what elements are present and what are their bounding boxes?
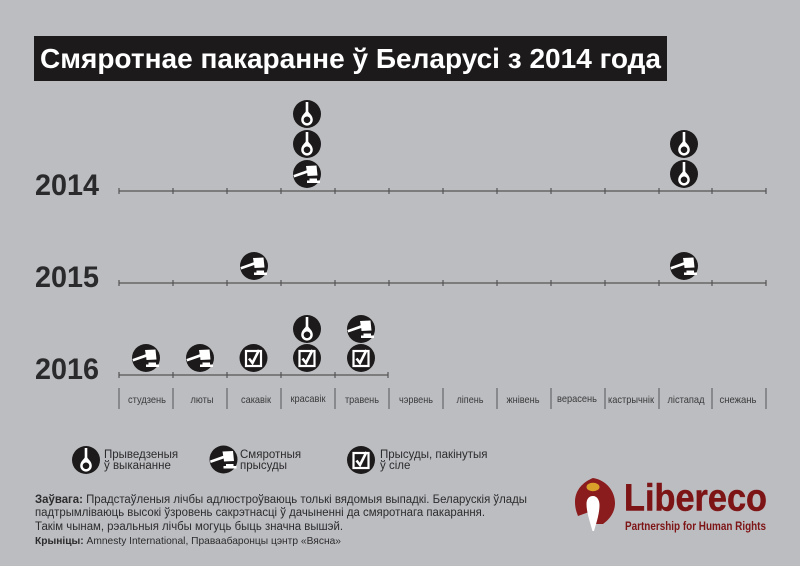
year label 2014: 2014 — [35, 169, 99, 202]
month labels: жнівень — [506, 394, 540, 406]
timeline axis 2014 — [119, 188, 766, 194]
logo: Libereco — [575, 478, 767, 533]
legend item: executed — [72, 446, 178, 474]
sources: Крыніцы: Amnesty International, Праваабаронцы цэнтр «Вясна» — [35, 535, 341, 547]
icon: March 2016 — [240, 344, 268, 372]
month labels: красавік — [290, 393, 326, 405]
month labels: сакавік — [241, 394, 271, 406]
title: Смяротнае пакаранне ў Беларусі з 2014 года — [40, 43, 662, 74]
legend item: death sentences — [210, 446, 301, 474]
note: падтрымліваюць высокі ўзровень сакрэтнасці ў дачыненні да смяротнага пакарання. — [35, 507, 485, 519]
timeline axis 2016 — [119, 372, 388, 378]
icons: April 2016 — [293, 315, 321, 372]
month labels: люты — [190, 394, 214, 406]
month labels: травень — [345, 394, 379, 406]
month labels: кастрычнік — [608, 394, 654, 406]
month labels: студзень — [128, 394, 166, 406]
month labels: чэрвень — [399, 394, 433, 406]
note — [35, 494, 527, 533]
legend item: sentences upheld: ў сіле — [380, 460, 410, 472]
month labels: верасень — [557, 393, 597, 405]
year row: 2016 — [35, 315, 388, 386]
icon: February 2016 — [186, 344, 214, 372]
legend item: sentences upheld: Прысуды, пакінутыя — [380, 449, 487, 461]
month labels: лістапад — [668, 394, 704, 406]
logo tagline: Partnership for Human Rights — [625, 519, 766, 533]
title — [34, 36, 667, 81]
year label 2016: 2016 — [35, 353, 99, 386]
legend item: death sentences: прысуды — [240, 460, 287, 472]
year label 2015: 2015 — [35, 261, 99, 294]
icon: January 2016 — [132, 344, 160, 372]
logo emblem — [575, 478, 615, 531]
icon: November 2015 — [670, 252, 698, 280]
year row: 2015 — [35, 252, 766, 294]
year row: 2014 — [35, 100, 766, 202]
icons: May 2016 — [347, 315, 375, 372]
icons: April 2014 — [293, 100, 321, 188]
month labels — [119, 388, 766, 409]
legend item: executed: Прыведзеныя — [104, 449, 178, 461]
legend item: executed: ў выкананне — [104, 460, 171, 472]
note: Такім чынам, рэальныя лічбы могуць быць значна вышэй. — [35, 521, 343, 533]
icons: November 2014 — [670, 130, 698, 188]
logo wordmark: Libereco — [624, 478, 767, 520]
legend — [72, 446, 487, 474]
note: Заўвага: Прадстаўленыя лічбы адлюстроўваюць толькі вядомыя выпадкі. Беларускія ўлады — [35, 494, 527, 506]
month labels: ліпень — [456, 394, 484, 406]
legend item: death sentences: Смяротныя — [240, 449, 301, 461]
month labels: снежань — [720, 394, 757, 406]
timeline axis 2015 — [119, 280, 766, 286]
icon: March 2015 — [240, 252, 268, 280]
legend item: sentences upheld — [347, 446, 487, 474]
